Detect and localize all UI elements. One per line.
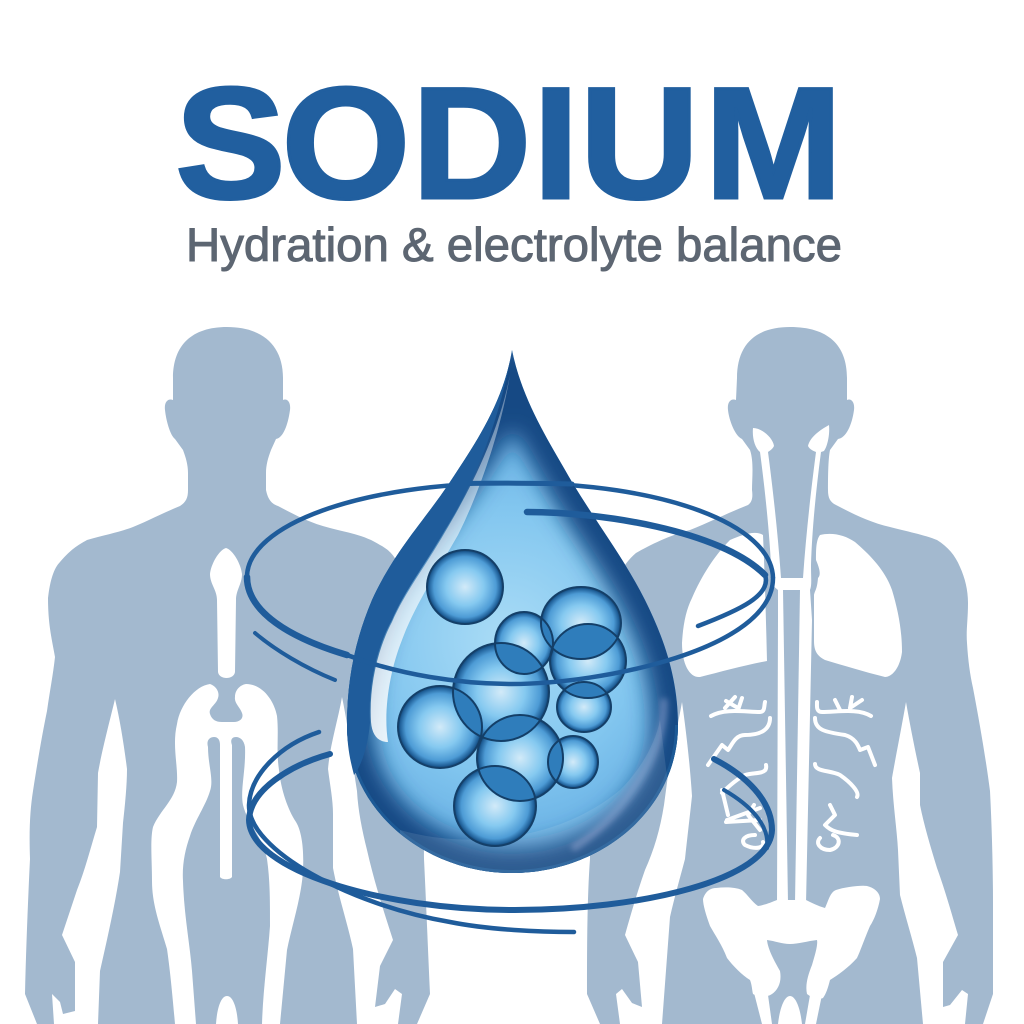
- sodium ion bubbles: [398, 550, 626, 846]
- organ: upper airway: [210, 548, 242, 678]
- bubble fills: [398, 550, 626, 846]
- right body silhouette with anatomy: [587, 327, 993, 1024]
- thin ring top crossing the drop: [470, 481, 572, 486]
- lower thin ring: [249, 732, 574, 932]
- organ: left lung: [682, 533, 767, 677]
- thick upper ring: [527, 512, 765, 575]
- left hip band: [752, 985, 772, 1024]
- left highlight strip: [371, 375, 510, 742]
- bubble overlaps: [454, 620, 616, 800]
- drop edge shading: [347, 350, 680, 880]
- upper ring tail: [698, 575, 766, 626]
- short arc left: [255, 633, 335, 680]
- gap between legs: [778, 996, 802, 1024]
- lower right reflection: [575, 702, 664, 847]
- lower thick ring: [249, 754, 772, 910]
- back of thin orbit ring: [247, 483, 773, 578]
- subtitle: Hydration & electrolyte balance: [186, 218, 842, 271]
- organ: right lung: [814, 534, 902, 677]
- drop body: [347, 350, 678, 873]
- water drop: [347, 350, 680, 880]
- left dark band: [347, 350, 512, 775]
- title: SODIUM: [175, 55, 842, 232]
- orbit rings around the drop: [247, 483, 773, 932]
- thin ring front left, thick part: [247, 577, 347, 655]
- skeleton: central spinal column: [783, 590, 800, 907]
- short arc right: [724, 790, 767, 848]
- skeleton: pelvis: [703, 886, 880, 999]
- skeleton: spinal rails and nerve bulbs: [753, 425, 829, 904]
- lower light band: [400, 720, 680, 880]
- bubble outlines: [398, 550, 626, 846]
- left body silhouette with organs: [25, 327, 430, 1024]
- nerves and vessels: right branches: [815, 697, 875, 850]
- right hip band: [805, 985, 824, 1024]
- thin ring front arc: [347, 578, 773, 684]
- organ: white torso bands: [151, 684, 303, 1024]
- organ: gap between legs: [216, 996, 238, 1024]
- nerves and vessels: left branches: [708, 697, 770, 848]
- body outline: right figure: [587, 327, 993, 1024]
- body outline: left figure: [25, 327, 430, 1024]
